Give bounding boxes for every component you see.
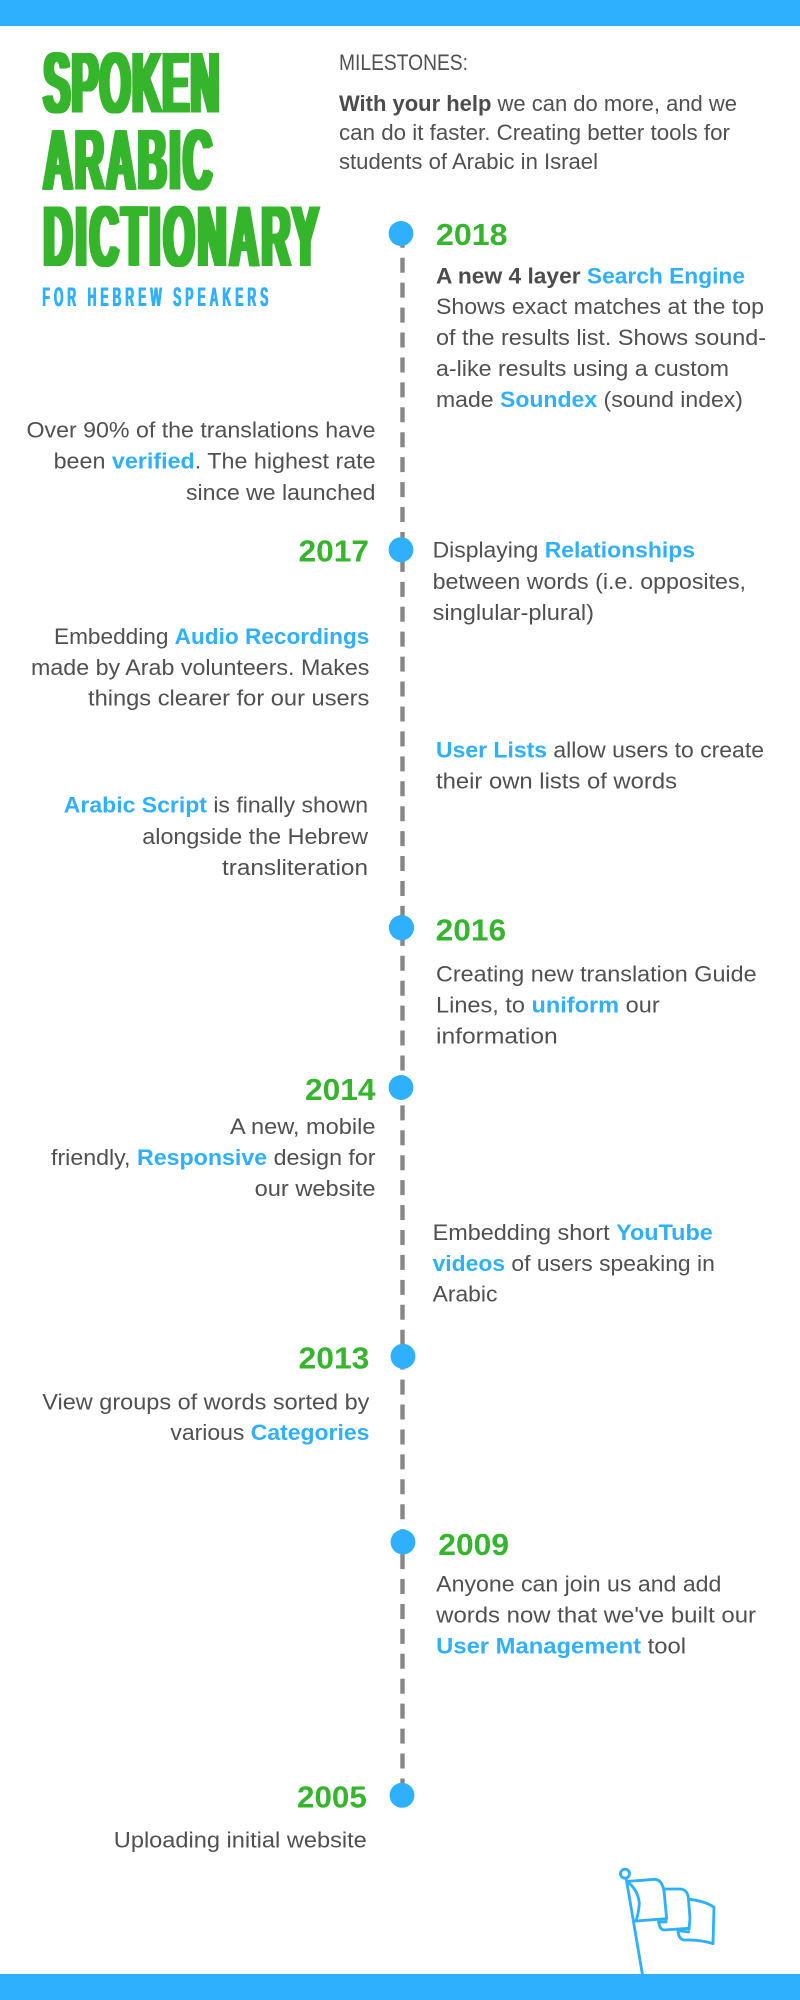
subtitle: FOR HEBREW SPEAKERS <box>42 283 268 312</box>
text: user management: words now that we've built our <box>435 1603 757 1628</box>
year 2013: 2013 <box>298 1340 369 1375</box>
text: arabic script: Arabic Script is finally shown <box>64 793 368 818</box>
title <box>41 35 316 285</box>
intro text: With your help we can do more, and we <box>339 91 737 116</box>
text: categories: View groups of words sorted by <box>42 1389 370 1414</box>
intro text: can do it faster. Creating better tools for <box>339 120 730 145</box>
timeline line <box>400 233 405 1795</box>
text: initial website: Uploading initial website <box>114 1828 367 1853</box>
text: relationships: Displaying Relationships <box>433 538 695 563</box>
text: youtube videos <box>433 1220 715 1307</box>
text: guide lines: Creating new translation Guide <box>436 962 757 987</box>
text: responsive: friendly, Responsive design for <box>51 1145 376 1170</box>
text: relationships: between words (i.e. opposites, <box>433 569 746 594</box>
text: verified: Over 90% of the translations have <box>26 418 376 443</box>
text: arabic script: transliteration <box>222 855 368 880</box>
timeline dots <box>389 221 415 1808</box>
intro text <box>339 50 737 174</box>
text: verified <box>26 418 376 505</box>
title: DICTIONARY <box>41 189 316 285</box>
text: responsive <box>51 1114 376 1201</box>
text: audio recordings: things clearer for our users <box>88 686 369 711</box>
text: user lists: User Lists allow users to create <box>436 738 764 763</box>
text: search engine: Shows exact matches at the top <box>436 294 764 319</box>
intro text: MILESTONES: <box>339 50 468 75</box>
text: user management: User Management tool <box>436 1634 686 1659</box>
title: SPOKEN <box>41 35 217 132</box>
text: relationships: singlular-plural) <box>433 600 594 625</box>
text: search engine: A new 4 layer Search Engine <box>436 263 745 288</box>
year 2017: 2017 <box>298 534 369 569</box>
bottom bar <box>0 1974 800 2000</box>
text: user management <box>435 1572 757 1659</box>
text: search engine: made Soundex (sound index) <box>436 387 743 412</box>
year 2018: 2018 <box>436 217 508 252</box>
text: verified: been verified. The highest rate <box>54 448 376 474</box>
text: search engine <box>436 263 766 412</box>
text: youtube videos: Embedding short YouTube <box>433 1220 713 1245</box>
text: user lists <box>436 738 764 794</box>
icon: flag <box>620 1869 714 1974</box>
text: verified: since we launched <box>186 480 376 505</box>
text: user lists: their own lists of words <box>436 769 677 794</box>
text: responsive: A new, mobile <box>230 1114 376 1139</box>
title: ARABIC <box>41 112 209 209</box>
text: search engine: of the results list. Shows sound- <box>436 325 766 350</box>
year 2016: 2016 <box>436 913 506 948</box>
text: arabic script <box>64 793 369 880</box>
text: arabic script: alongside the Hebrew <box>142 824 369 849</box>
text: search engine: a-like results using a custom <box>436 356 729 381</box>
text: responsive: our website <box>255 1176 376 1201</box>
text: audio recordings: made by Arab volunteers. Makes <box>31 655 369 680</box>
text: audio recordings: Embedding Audio Recordings <box>54 624 369 649</box>
year 2005: 2005 <box>297 1780 367 1815</box>
text: relationships <box>433 538 746 625</box>
top bar <box>0 0 800 26</box>
intro text: students of Arabic in Israel <box>339 149 598 174</box>
year 2009: 2009 <box>438 1527 509 1562</box>
text: guide lines <box>436 962 757 1048</box>
text: youtube videos: videos of users speaking in <box>433 1251 715 1276</box>
text: audio recordings <box>31 624 369 711</box>
text: user management: Anyone can join us and add <box>436 1572 721 1597</box>
text: guide lines: information <box>436 1023 558 1048</box>
text: guide lines: Lines, to uniform our <box>436 993 660 1018</box>
text: youtube videos: Arabic <box>433 1282 497 1307</box>
year 2014: 2014 <box>305 1072 376 1107</box>
text: categories: various Categories <box>170 1420 369 1445</box>
text: categories <box>42 1389 370 1445</box>
